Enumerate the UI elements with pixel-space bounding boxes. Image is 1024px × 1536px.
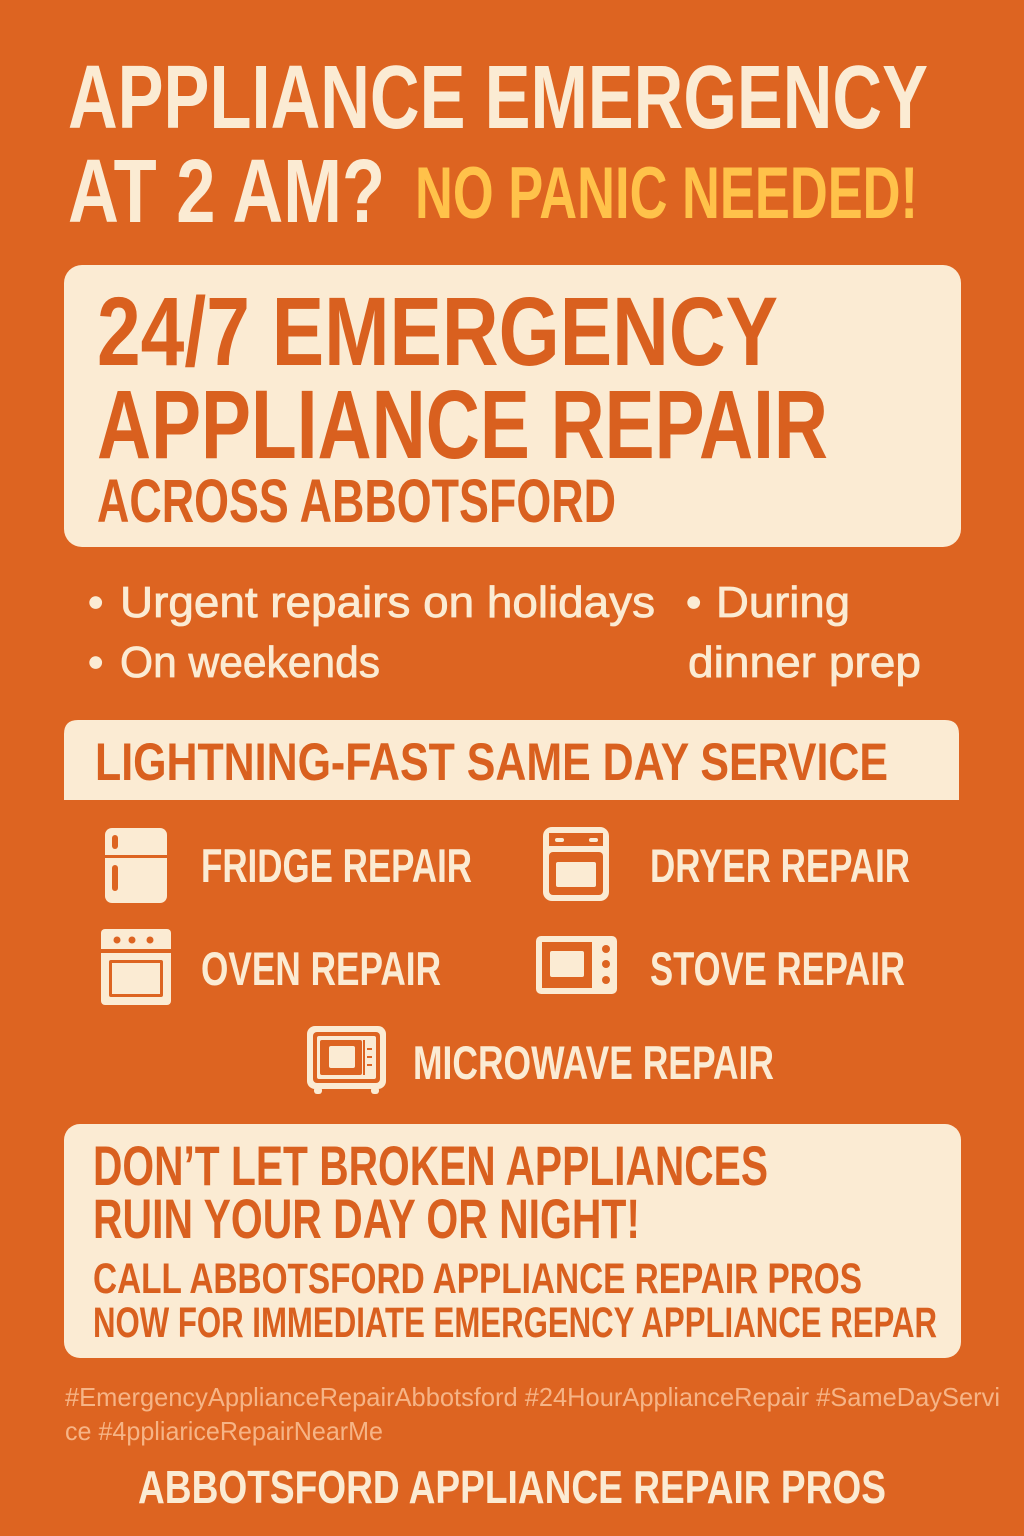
- icon: fridge: [105, 828, 167, 903]
- banner: same day service: [64, 720, 959, 800]
- label: stove repair: STOVE REPAIR: [650, 942, 905, 995]
- label: oven repair: OVEN REPAIR: [201, 942, 441, 995]
- icon: oven: [101, 929, 171, 1005]
- panel: 24/7 emergency: 24/7 EMERGENCY: [97, 277, 778, 386]
- bullet list: •: [88, 638, 103, 687]
- panel: 24/7 emergency: APPLIANCE REPAIR: [97, 370, 828, 479]
- panel: call to action: RUIN YOUR DAY OR NIGHT!: [93, 1187, 640, 1250]
- bullet list: dinner prep: [688, 638, 921, 687]
- label: dryer repair: DRYER REPAIR: [650, 839, 910, 892]
- bullet list: During: [716, 578, 850, 627]
- title: [68, 48, 928, 242]
- bullet list: Urgent repairs on holidays: [120, 578, 655, 627]
- label: microwave repair: MICROWAVE REPAIR: [413, 1036, 774, 1089]
- label: fridge repair: FRIDGE REPAIR: [201, 839, 472, 892]
- bullet list: [88, 578, 921, 687]
- panel: call to action: [64, 1124, 961, 1358]
- panel: call to action: DON’T LET BROKEN APPLIANCES: [93, 1134, 768, 1197]
- bullet list: On weekends: [120, 638, 380, 687]
- panel: 24/7 emergency: ACROSS ABBOTSFORD: [97, 467, 616, 535]
- hashtags: [65, 1382, 1000, 1446]
- icon: stove: [536, 936, 617, 994]
- panel: 24/7 emergency: [64, 265, 961, 547]
- bullet list: •: [686, 578, 701, 627]
- hashtags: ce #4ppliariceRepairNearMe: [65, 1416, 383, 1446]
- title: AT 2 AM?: [68, 142, 385, 242]
- icon: dryer: [543, 827, 609, 901]
- bullet list: •: [88, 578, 103, 627]
- hashtags: #EmergencyApplianceRepairAbbotsford #24HourApplianceRepair #SameDayServi: [65, 1382, 1000, 1412]
- icon: microwave: [307, 1026, 386, 1094]
